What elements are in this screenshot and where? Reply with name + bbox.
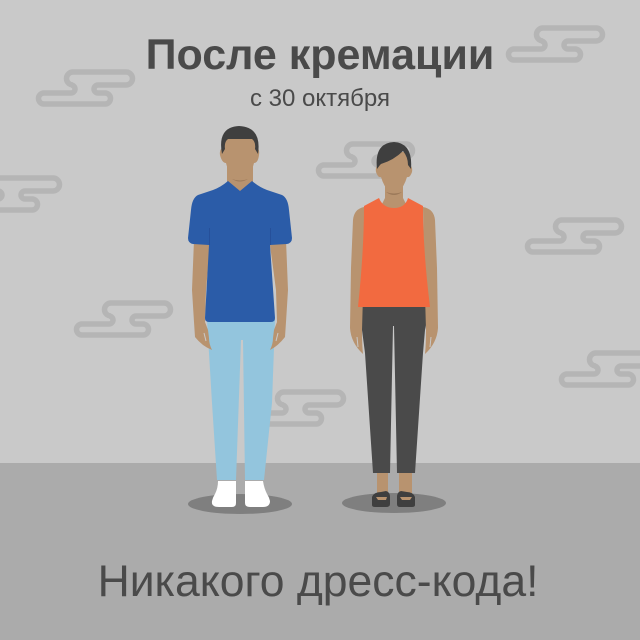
- shadow under woman: [342, 493, 446, 513]
- title: После кремации: [146, 31, 494, 79]
- woman thumb gaps: [357, 337, 431, 347]
- man hair: [221, 126, 259, 154]
- woman neck: [380, 180, 408, 208]
- woman toes: [376, 497, 412, 500]
- floor: [0, 463, 640, 640]
- man thumb gaps: [204, 333, 278, 341]
- woman legs: [377, 470, 412, 494]
- figure: woman: [342, 142, 446, 513]
- man trousers: [207, 320, 275, 480]
- man chin shadow: [232, 179, 248, 182]
- man sleeve creases: [210, 228, 270, 245]
- woman top: [358, 198, 430, 307]
- shadow under man: [188, 494, 292, 514]
- woman chin shadow: [386, 192, 402, 195]
- woman arms: [350, 207, 438, 354]
- woman sandals: [372, 491, 415, 507]
- man neck: [227, 165, 253, 194]
- woman trousers: [358, 306, 430, 473]
- man shoes: [212, 481, 270, 507]
- man shirt: [188, 181, 292, 322]
- woman face: [376, 152, 412, 193]
- footer text: Никакого дресс-кода!: [98, 557, 538, 606]
- man arms: [192, 240, 288, 350]
- clouds: [0, 28, 640, 424]
- figure: man: [188, 126, 292, 514]
- subtitle: с 30 октября: [250, 85, 390, 112]
- man face: [220, 136, 259, 180]
- woman hair: [377, 142, 411, 169]
